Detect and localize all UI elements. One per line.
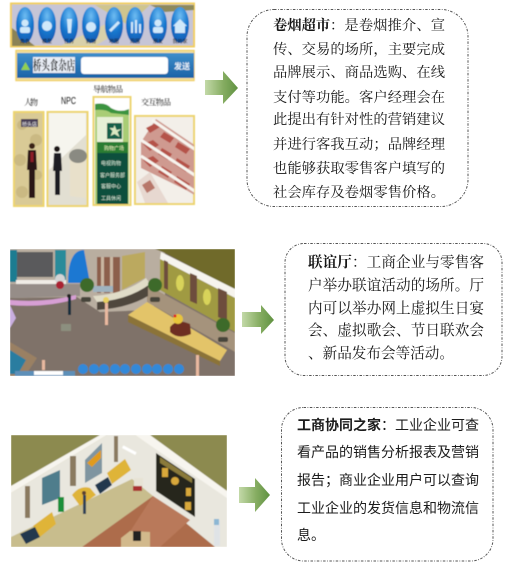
text: 工商协同之家 description: 息。 bbox=[297, 527, 325, 543]
category labels: 导航物品 bbox=[93, 84, 123, 94]
navigation item panel: 电视购物 bbox=[101, 160, 121, 167]
character panel: 桥头店 bbox=[22, 121, 37, 128]
text: 卷烟超市 description: 此提出有针对性的营销建议 bbox=[273, 110, 445, 128]
text: 联谊厅 description: 会、虚拟歌会、节日联欢会 bbox=[308, 321, 484, 339]
category labels: NPC bbox=[61, 96, 76, 107]
arrow: supermarket to description bbox=[205, 71, 238, 104]
text: 工商协同之家 description: 报告；商业企业用户可以查询 bbox=[297, 472, 479, 489]
panel: 工商协同之家 bbox=[282, 408, 493, 561]
text: 联谊厅 description: 内可以举办网上虚拟生日宴 bbox=[308, 300, 484, 317]
interactive shelf panel bbox=[135, 116, 196, 204]
text: 联谊厅 description: 、新品发布会等活动。 bbox=[308, 345, 454, 362]
icon toolbar: 角色 bbox=[20, 38, 30, 45]
text: 联谊厅 description: ：工商企业与零售客 bbox=[352, 254, 484, 271]
icon toolbar: 我的家 bbox=[172, 38, 188, 45]
text: 卷烟超市 description bbox=[273, 16, 446, 201]
chat input bar bbox=[16, 50, 194, 80]
navigation item panel: 客户服务部 bbox=[100, 172, 125, 179]
text: 联谊厅 description bbox=[308, 253, 484, 362]
text: 工商协同之家 description: 工业企业的发货信息和物流信 bbox=[297, 500, 479, 516]
text: 卷烟超市 description: 支付等功能。客户经理会在 bbox=[273, 89, 445, 106]
panel: 联谊厅 bbox=[285, 244, 502, 376]
text: 工商协同之家 description bbox=[297, 417, 479, 543]
text: 工商协同之家 description: 工商协同之家 bbox=[297, 417, 381, 433]
text: 联谊厅 description: 户举办联谊活动的场所。厅 bbox=[308, 277, 484, 294]
navigation item panel: 工具休闲 bbox=[101, 195, 121, 202]
text: 卷烟超市 description: 并进行客我互动；品牌经理 bbox=[273, 136, 446, 153]
text: 卷烟超市 description: 社会库存及卷烟零售价格。 bbox=[273, 183, 445, 201]
category labels bbox=[24, 84, 171, 107]
screenshot: 联谊厅 virtual hall bbox=[10, 249, 235, 376]
screenshot: virtual tobacco supermarket interface bbox=[11, 4, 196, 206]
text: 联谊厅 description: 联谊厅 bbox=[308, 253, 352, 271]
icon toolbar: 模型 bbox=[42, 38, 52, 45]
text: 卷烟超市 description: 传、交易的场所，主要完成 bbox=[273, 41, 445, 58]
arrow: office to description bbox=[239, 478, 270, 512]
text: 工商协同之家 description: 看产品的销售分析报表及营销 bbox=[297, 444, 479, 460]
chat input bar: 桥头食杂店 bbox=[33, 58, 75, 73]
navigation item panel: 购物广场 bbox=[104, 145, 124, 152]
icon toolbar bbox=[11, 4, 194, 46]
navigation item panel bbox=[94, 97, 130, 205]
chat input bar: 发送 bbox=[174, 61, 190, 71]
text: 卷烟超市 description: 也能够获取零售客户填写的 bbox=[273, 159, 445, 177]
NPC panel bbox=[48, 112, 88, 206]
arrow: hall to description bbox=[242, 305, 274, 334]
icon toolbar: 朋友 bbox=[153, 38, 163, 45]
navigation item panel: 客服中心 bbox=[101, 183, 121, 190]
category labels: 交互物品 bbox=[141, 97, 171, 107]
text: 工商协同之家 description: ：工业企业可查 bbox=[381, 417, 479, 433]
icon toolbar: 周围 bbox=[130, 39, 140, 45]
icon toolbar: 购物 bbox=[86, 38, 96, 45]
text: 卷烟超市 description: 卷烟超市 bbox=[273, 16, 330, 34]
text: 卷烟超市 description: ：是卷烟推介、宣 bbox=[330, 16, 445, 34]
panel: 卷烟超市 bbox=[247, 10, 468, 206]
icon toolbar: 任务 bbox=[64, 38, 74, 45]
category labels: 人物 bbox=[24, 97, 38, 107]
character panel bbox=[14, 112, 44, 206]
icon toolbar: 地图 bbox=[109, 38, 119, 45]
text: 卷烟超市 description: 品牌展示、商品选购、在线 bbox=[273, 64, 445, 81]
screenshot: 工商协同之家 virtual office bbox=[11, 435, 227, 547]
